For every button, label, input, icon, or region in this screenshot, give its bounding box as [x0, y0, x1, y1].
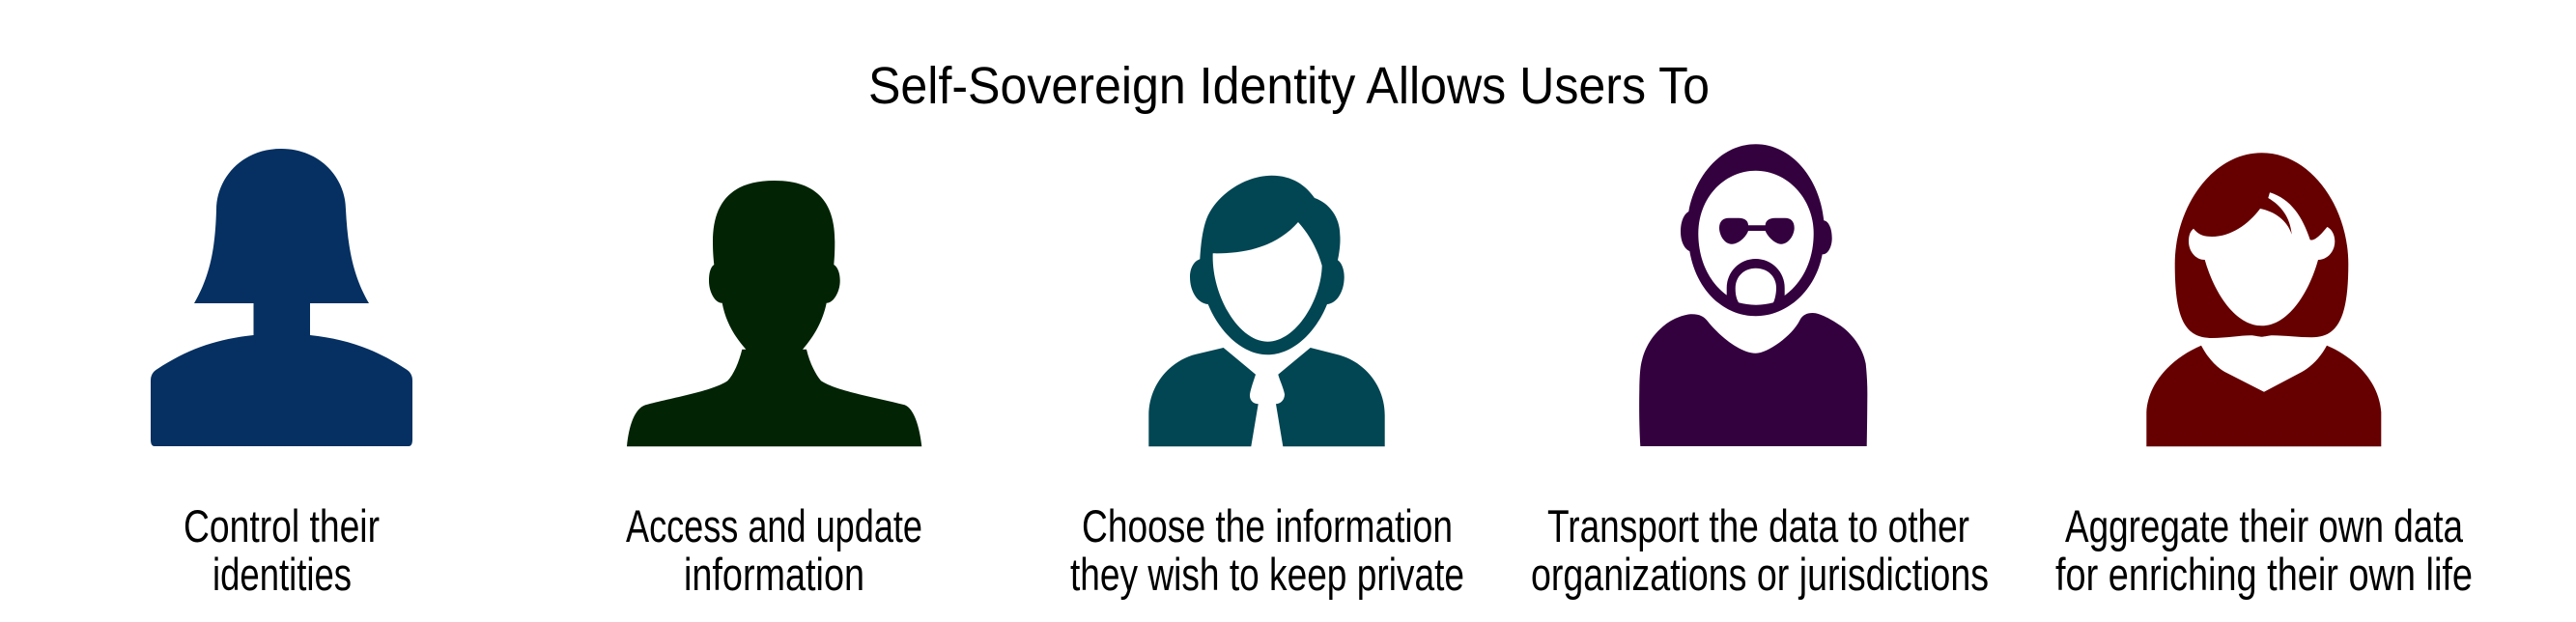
caption: choose the information they wish to keep private: Choose the information — [1082, 500, 1453, 551]
caption: transport the data to other organizations or jurisdictions: Transport the data to other — [1547, 500, 1969, 551]
caption: transport the data to other organizations or jurisdictions — [1531, 500, 1989, 600]
caption: aggregate their own data for enriching their own life — [2055, 500, 2473, 600]
panel: aggregate their own data — [2055, 153, 2473, 600]
caption: access and update information: information — [684, 549, 864, 600]
icon: woman with bob haircut, dark red — [2146, 153, 2381, 446]
panel: choose the information to keep private — [1070, 176, 1464, 600]
caption: control their identities — [184, 500, 380, 600]
panel: transport the data — [1531, 144, 1989, 600]
caption: control their identities: Control their — [184, 500, 380, 551]
icon: woman silhouette, navy — [151, 149, 412, 446]
caption: access and update information — [626, 500, 922, 600]
caption: access and update information: Access and update — [626, 500, 922, 551]
caption: transport the data to other organizations or jurisdictions: organizations or jurisdictions — [1531, 549, 1989, 600]
icon: man with tie, teal — [1148, 176, 1385, 446]
icon: man silhouette, dark green — [627, 181, 921, 446]
caption: aggregate their own data for enriching their own life: Aggregate their own data — [2065, 500, 2464, 551]
title: Self-Sovereign Identity Allows Users To — [868, 57, 1710, 115]
caption: control their identities: identities — [212, 549, 352, 600]
caption: choose the information they wish to keep private: they wish to keep private — [1070, 549, 1464, 600]
icon: bearded man with glasses, purple — [1639, 144, 1867, 446]
caption: choose the information they wish to keep private — [1070, 500, 1464, 600]
panel: control their identities — [151, 149, 412, 600]
panel: access and update information — [626, 181, 922, 600]
caption: aggregate their own data for enriching their own life: for enriching their own life — [2055, 549, 2473, 600]
